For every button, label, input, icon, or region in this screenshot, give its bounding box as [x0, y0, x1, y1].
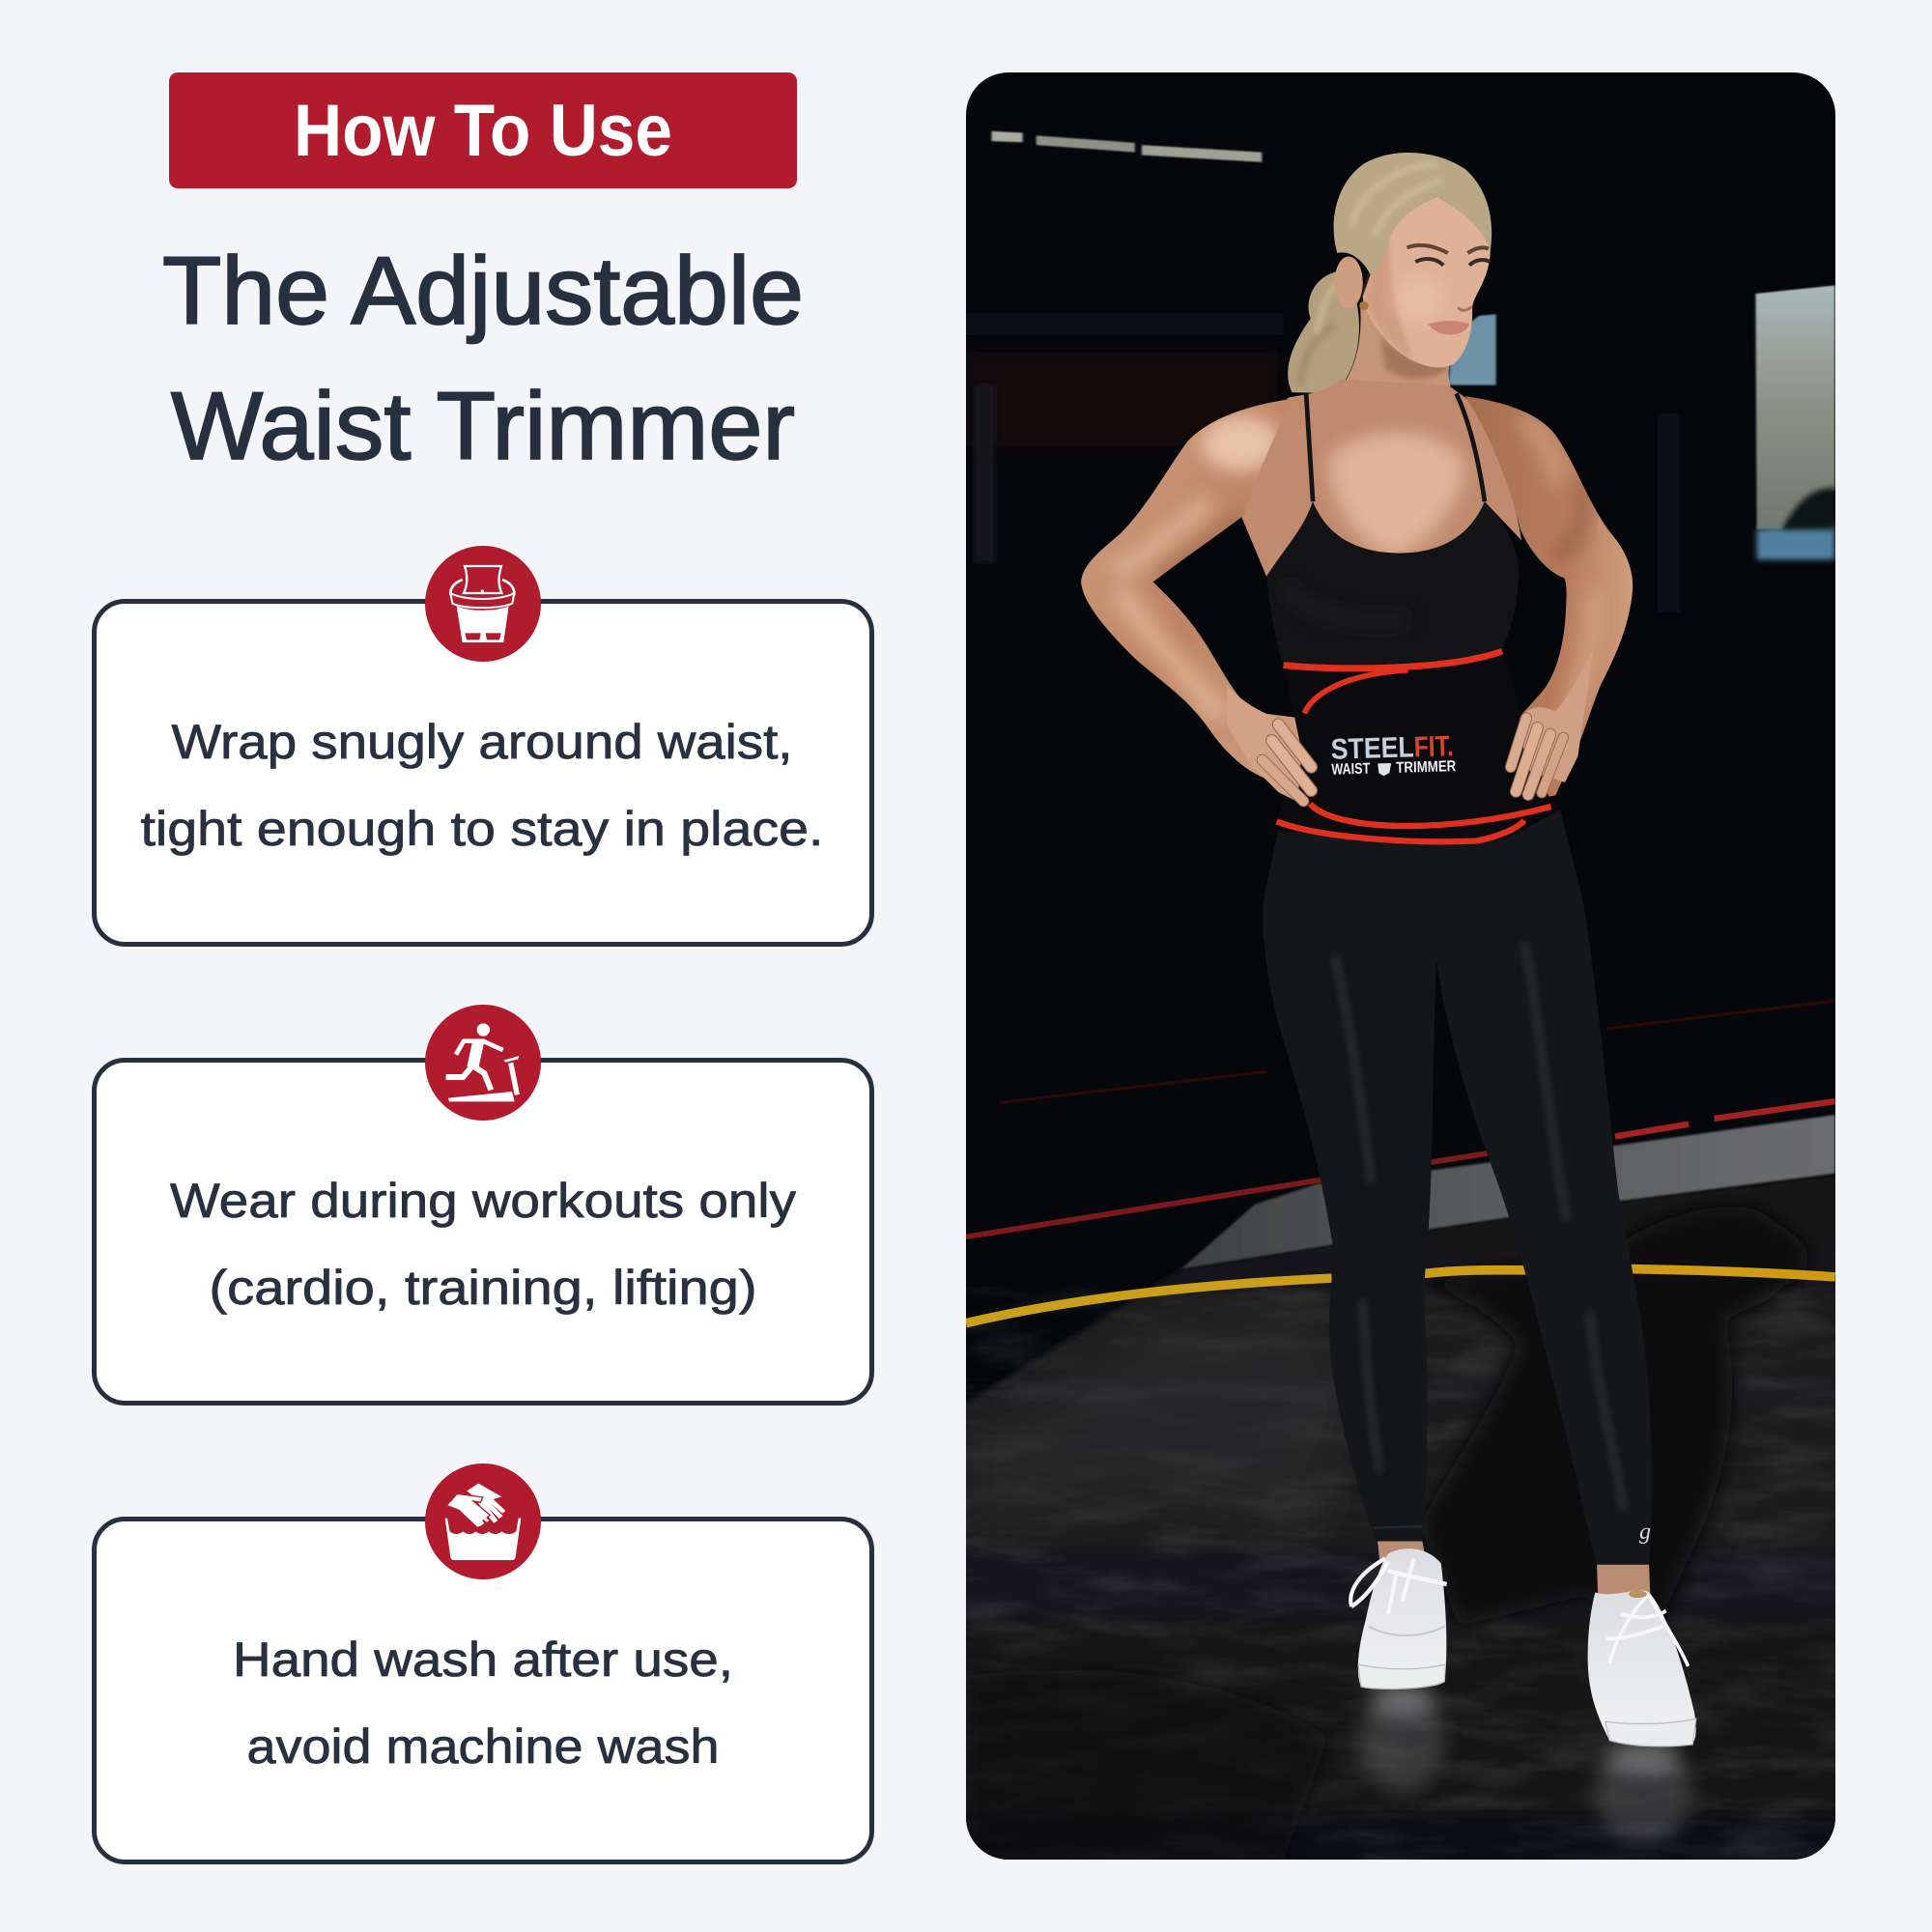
belt logo: TRIMMER — [1396, 758, 1457, 777]
lower legs and sneakers — [1263, 905, 1696, 1747]
title: Waist Trimmer — [171, 372, 795, 479]
ponytail — [1288, 271, 1359, 393]
hair — [1334, 153, 1492, 277]
neck — [1346, 301, 1451, 386]
background details — [966, 131, 1835, 612]
icon: hand wash basin — [425, 1463, 541, 1579]
step 3 text: avoid machine wash — [247, 1719, 719, 1774]
step 1 text: Wrap snugly around waist, — [172, 715, 792, 769]
title — [162, 237, 804, 479]
window behind face — [1448, 314, 1496, 385]
face — [1363, 197, 1491, 367]
panel: step 2 workouts — [95, 1005, 871, 1403]
belt logo: WAIST — [1331, 761, 1371, 779]
belt logo: FIT. — [1413, 730, 1454, 763]
step 1 text — [141, 715, 823, 856]
icon: treadmill runner — [425, 1005, 541, 1121]
step 3 text — [233, 1633, 733, 1774]
right leg — [1419, 905, 1652, 1566]
panel: step 3 wash — [95, 1463, 871, 1862]
gym floor and lines — [944, 1001, 1861, 1891]
upper photo: background, woman — [966, 131, 1835, 940]
belt logo — [1331, 736, 1456, 777]
chest and shoulders — [1241, 380, 1521, 577]
leggings hips — [1263, 810, 1584, 940]
left arm — [1081, 400, 1300, 779]
legging logo: g — [1639, 1520, 1651, 1545]
badge: How To Use — [169, 72, 797, 188]
left leg — [1263, 905, 1436, 1541]
step 2 text — [170, 1174, 796, 1315]
step 2 text: Wear during workouts only — [170, 1174, 796, 1228]
panel: step 1 wrap — [95, 546, 871, 945]
belt logo: STEEL — [1330, 731, 1414, 766]
right arm — [1464, 396, 1633, 801]
back window — [1755, 285, 1835, 529]
hands on waist — [1227, 647, 1594, 802]
step 2 text: (cardio, training, lifting) — [209, 1261, 757, 1315]
title: The Adjustable — [162, 237, 804, 344]
waist trimmer belt — [1277, 651, 1551, 845]
icon: waist wrap — [425, 546, 541, 662]
left sneaker — [1358, 1548, 1446, 1689]
tank top — [1266, 501, 1519, 667]
step 1 text: tight enough to stay in place. — [141, 802, 823, 856]
ankle skin — [1378, 1542, 1650, 1594]
ear — [1334, 256, 1363, 308]
right sneaker — [1588, 1591, 1696, 1747]
step 3 text: Hand wash after use, — [233, 1633, 733, 1687]
photo: woman wearing waist trimmer in gym — [944, 72, 1861, 1891]
photo background — [966, 72, 1835, 1860]
badge: How To Use: How To Use — [294, 90, 672, 172]
